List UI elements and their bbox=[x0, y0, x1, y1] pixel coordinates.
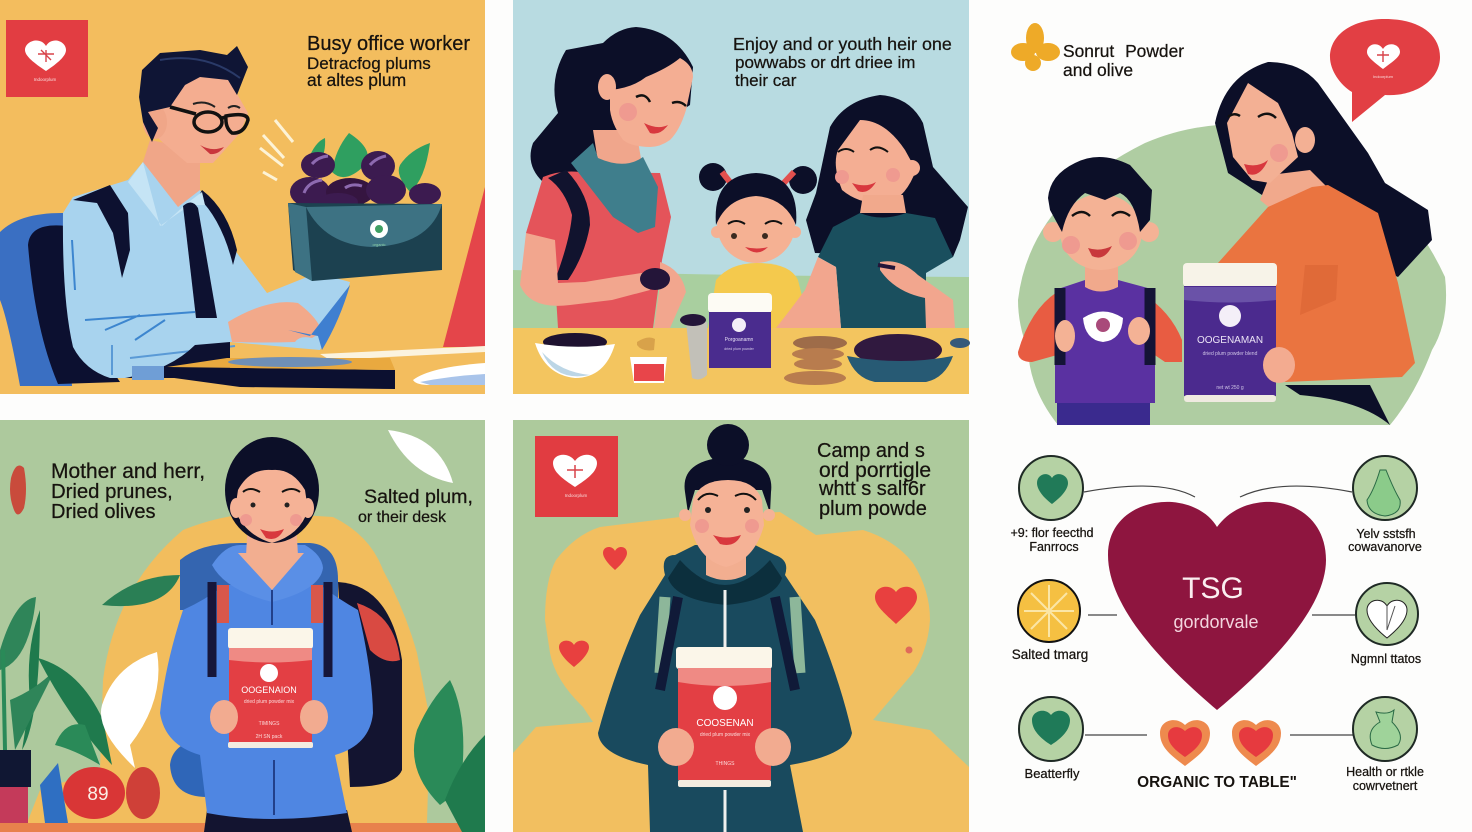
green backdrop circle bbox=[1018, 125, 1446, 425]
logo badge: red square with heart: Indoorplum bbox=[34, 77, 57, 82]
icon: sack circle bbox=[1353, 697, 1417, 761]
caption: camp and porridge: whtt s salf6r bbox=[818, 478, 926, 500]
red product pack: THINGS bbox=[716, 761, 735, 767]
organic to table label: ORGANIC TO TABLE" bbox=[1137, 774, 1297, 791]
purple jar: dried plum powder blend bbox=[1203, 351, 1258, 357]
caption: enjoy: Enjoy and or youth heir one bbox=[733, 34, 952, 54]
backpack straps bbox=[73, 185, 130, 278]
boy bbox=[1018, 157, 1182, 425]
grater bbox=[680, 314, 707, 379]
yellow blob bbox=[27, 513, 430, 823]
white leaf center left bbox=[101, 652, 158, 768]
red chili bbox=[10, 466, 26, 515]
arm bbox=[520, 233, 650, 306]
purple jar: OOGENAMAN bbox=[1197, 335, 1263, 346]
icon: fruit hearts bbox=[1160, 720, 1281, 766]
panel: heart diagram bbox=[1010, 456, 1424, 793]
caption: camp and porridge: plum powde bbox=[819, 498, 927, 520]
child figure bbox=[699, 163, 817, 328]
diagram labels: cowrvetnert bbox=[1353, 779, 1418, 793]
purple product jar bbox=[708, 293, 772, 368]
diagram labels: Ngmnl ttatos bbox=[1351, 652, 1421, 666]
purple product jar: Porgoanamn bbox=[725, 337, 754, 343]
motion ticks bbox=[260, 120, 293, 180]
icon: pear circle bbox=[1353, 456, 1417, 520]
hands holding pack bbox=[210, 700, 328, 734]
caption: enjoy: powwabs or drt driee im bbox=[735, 53, 915, 72]
tie bbox=[183, 202, 217, 318]
white feather bbox=[388, 430, 453, 483]
red product pack: COOSENAN bbox=[696, 718, 754, 729]
red product pack bbox=[676, 647, 772, 787]
caption: salted plum: or their desk bbox=[358, 509, 447, 526]
diagram labels: cowavanorve bbox=[1348, 540, 1422, 554]
pancake stack bbox=[784, 336, 847, 385]
red product pack: dried plum powder mix bbox=[700, 732, 751, 738]
red product pack: 2H SN pack bbox=[256, 734, 283, 740]
keyboard and desk bbox=[167, 357, 395, 389]
panel: family at table bbox=[513, 0, 970, 394]
diagram labels: +9: flor feecthd bbox=[1010, 526, 1094, 540]
caption: busy office worker: at altes plum bbox=[307, 70, 406, 90]
central heart: gordorvale bbox=[1173, 612, 1259, 632]
worker hand on keyboard bbox=[228, 302, 322, 342]
collar bbox=[128, 162, 205, 226]
caption: enjoy bbox=[733, 34, 952, 90]
dark jacket figure bbox=[598, 424, 852, 832]
caption: mother and dried fruit: Mother and herr, bbox=[51, 460, 205, 483]
icon: white heart circle bbox=[1356, 583, 1418, 645]
diagram labels: Fanrrocs bbox=[1029, 540, 1079, 554]
mother figure bbox=[520, 27, 693, 328]
red heart badge bbox=[535, 436, 618, 517]
desk stand bbox=[320, 346, 485, 360]
caption: enjoy: their car bbox=[735, 71, 797, 90]
red product pack bbox=[228, 628, 313, 748]
yellow blob bbox=[513, 512, 969, 832]
panel: mother with red product bbox=[0, 420, 485, 832]
plant pot bbox=[0, 750, 31, 823]
icon: citrus circle bbox=[1018, 580, 1080, 642]
connector lines bbox=[1084, 486, 1355, 735]
mouse bbox=[413, 363, 485, 385]
caption: camp and porridge: Camp and s bbox=[817, 440, 925, 462]
purple jar bbox=[1183, 263, 1277, 402]
older girl figure bbox=[776, 95, 968, 328]
teal scarf bbox=[571, 143, 658, 233]
green leaves left bbox=[0, 575, 180, 765]
right leaves bbox=[414, 680, 485, 832]
diagram labels bbox=[1010, 526, 1424, 793]
edge dish bbox=[950, 338, 970, 348]
apples: 89 bbox=[87, 784, 109, 805]
small nut and cup bbox=[630, 338, 667, 383]
caption: busy office worker: Busy office worker bbox=[307, 33, 470, 55]
purple jar: net wt 250 g bbox=[1216, 385, 1244, 391]
caption: mother and dried fruit: Dried prunes, bbox=[51, 481, 173, 503]
diagram labels: Yelv sstsfh bbox=[1356, 527, 1416, 541]
red speech bubble with heart bbox=[1330, 19, 1440, 122]
red dress bbox=[526, 172, 671, 328]
caption: mother and dried fruit bbox=[51, 460, 205, 523]
caption: camp and porridge: ord porrtigle bbox=[819, 459, 931, 482]
worker head bbox=[139, 46, 248, 207]
red product pack: TIMINGS bbox=[259, 721, 280, 727]
white bowl of prunes bbox=[535, 333, 615, 378]
sleeve creases bbox=[72, 240, 195, 340]
caption: powder and olive bbox=[1063, 41, 1184, 80]
blue hoodie woman bbox=[160, 437, 373, 832]
backpack bbox=[170, 543, 402, 797]
icon: dark green heart circle bbox=[1019, 697, 1083, 761]
caption: powder and olive: and olive bbox=[1063, 60, 1133, 80]
central heart bbox=[1108, 502, 1326, 710]
central heart: TSG bbox=[1182, 572, 1244, 605]
panel: camper with porridge bbox=[513, 420, 969, 832]
red product pack: dried plum powder mix bbox=[244, 699, 295, 705]
panel: busy office worker bbox=[0, 0, 485, 394]
hair bbox=[139, 46, 248, 142]
caption: powder and olive: Sonrut Powder bbox=[1063, 41, 1184, 61]
caption: salted plum: Salted plum, bbox=[364, 486, 473, 508]
diagram labels: Beatterfly bbox=[1025, 766, 1080, 781]
plum box bbox=[288, 133, 442, 281]
caption: mother and dried fruit: Dried olives bbox=[51, 501, 155, 523]
lower shirt shadow bbox=[125, 342, 230, 378]
apples bbox=[40, 763, 160, 823]
caption: busy office worker bbox=[307, 33, 470, 90]
diagram labels: Health or rtkle bbox=[1346, 765, 1424, 779]
floating hearts bbox=[559, 547, 917, 667]
red triangle backdrop bbox=[443, 187, 485, 347]
hand on jar bbox=[1263, 347, 1295, 383]
chair bbox=[0, 213, 120, 386]
caption: busy office worker: Detracfog plums bbox=[307, 54, 431, 73]
red heart badge: Indoorplum bbox=[565, 493, 588, 498]
plum box: organic bbox=[372, 242, 386, 247]
red speech bubble with heart: Indoorplum bbox=[1373, 74, 1394, 79]
icon: green heart circle bbox=[1019, 456, 1083, 520]
dark bowl of prunes bbox=[847, 334, 953, 382]
hands holding pack bbox=[658, 728, 791, 766]
caption: salted plum bbox=[358, 486, 473, 526]
woman bbox=[1215, 62, 1432, 425]
purple product jar: dried plum powder bbox=[724, 347, 755, 351]
logo badge: red square with heart bbox=[6, 20, 88, 97]
caption: camp and porridge bbox=[817, 440, 931, 520]
yellow flower logo bbox=[1011, 23, 1060, 71]
glasses bbox=[170, 107, 248, 133]
diagram labels: Salted tmarg bbox=[1012, 647, 1088, 662]
worker torso in light-blue shirt bbox=[63, 162, 350, 380]
red product pack: OOGENAION bbox=[241, 685, 297, 695]
panel: powder and olive, mother and son bbox=[1011, 19, 1446, 425]
